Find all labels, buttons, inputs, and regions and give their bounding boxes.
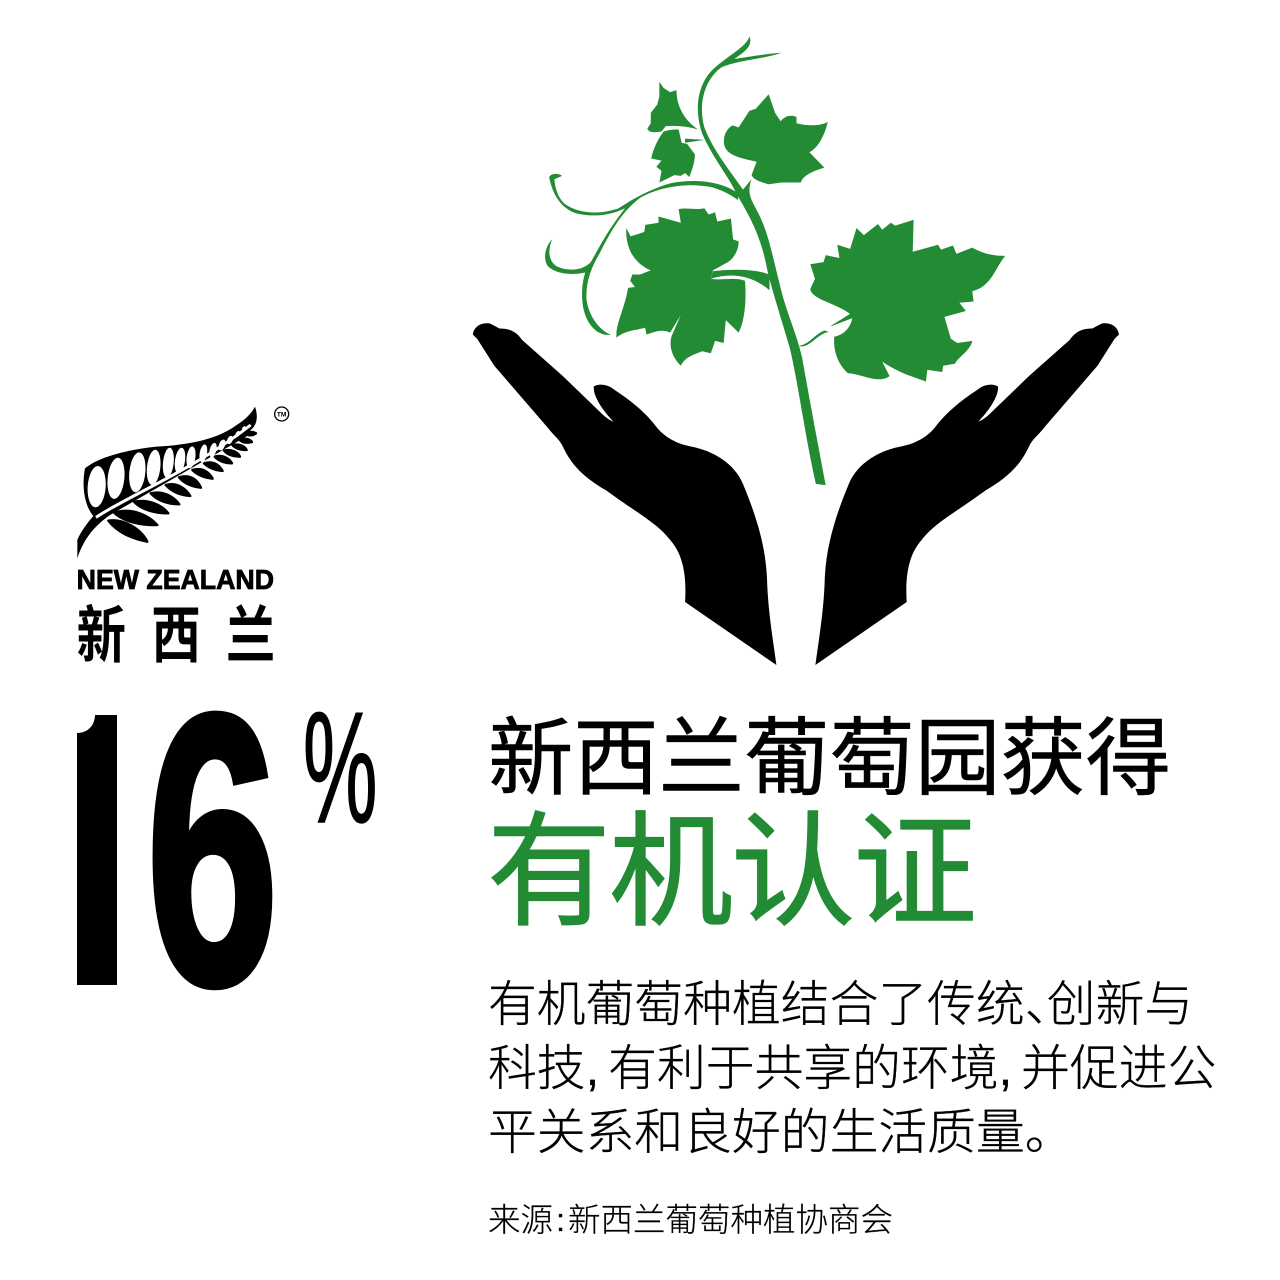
- illustration: hands holding a grapevine: [472, 36, 1119, 665]
- icon: trademark symbol: TM: [277, 412, 287, 419]
- icon: small top leaf: [647, 82, 698, 132]
- icon: silver fern: [77, 407, 257, 558]
- icon: grapevine: [545, 36, 1005, 485]
- icon: left hand: [473, 323, 776, 665]
- icon: trademark symbol: [275, 407, 289, 421]
- body paragraph: 平关系和良好的生活质量。: [488, 1106, 1074, 1160]
- icon: right hand: [815, 323, 1119, 665]
- source line: 来源:新西兰葡萄种植协商会: [488, 1202, 893, 1238]
- big number: 16%: [77, 690, 377, 1010]
- logo text: Chinese name: 新西兰: [77, 586, 300, 676]
- icon: large right leaf: [810, 220, 1005, 381]
- body paragraph: 有机葡萄种植结合了传统 创新与: [488, 978, 1193, 1032]
- body paragraph: 科技,有利于共享的环境,并促进公: [488, 1042, 1216, 1096]
- icon: small lower leaf: [651, 129, 704, 183]
- icon: large left leaf: [616, 208, 746, 366]
- icon: top-right leaf: [724, 94, 828, 184]
- heading line 2: green: 有机认证: [487, 804, 975, 942]
- logo text: NEW ZEALAND: NEW ZEALAND: [77, 564, 274, 595]
- number 16: [77, 710, 272, 990]
- body paragraph: [488, 978, 1216, 1160]
- logo: New Zealand fern mark: [77, 406, 300, 676]
- heading line 1: 新西兰葡萄园获得: [488, 712, 1171, 807]
- body paragraph: 、: [1025, 978, 1074, 1032]
